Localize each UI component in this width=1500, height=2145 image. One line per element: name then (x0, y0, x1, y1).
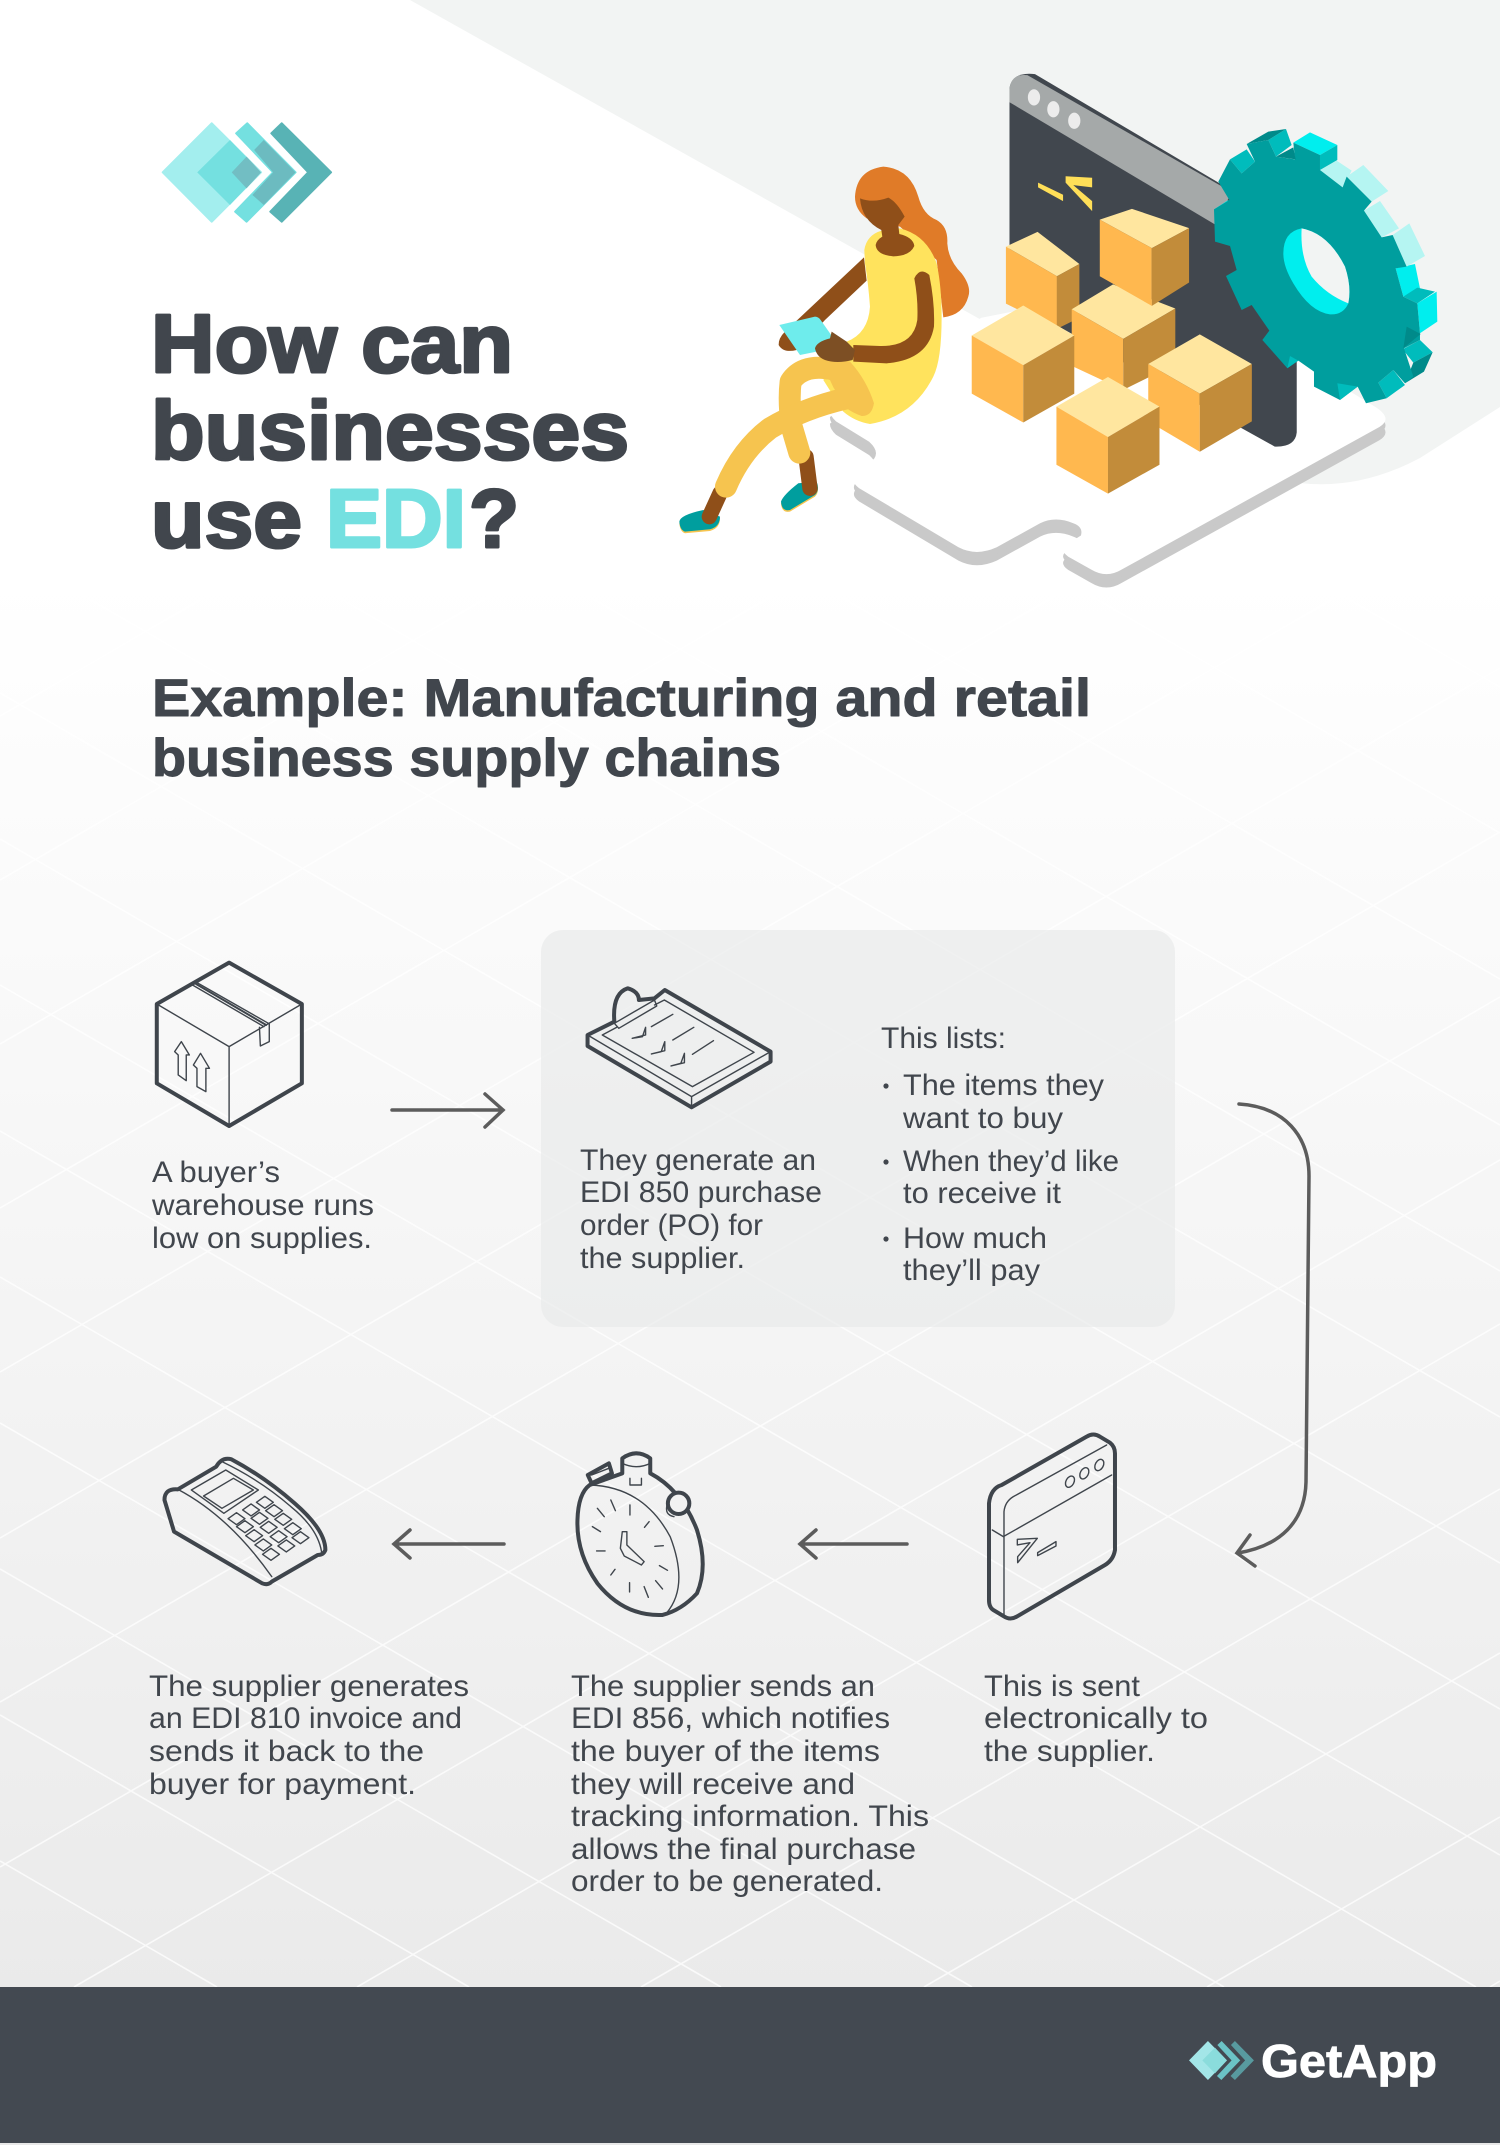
arrow: box to order (392, 1094, 503, 1127)
text: supplier sent electronically: electronically to (984, 1702, 1208, 1735)
title: EDI (326, 472, 466, 565)
text: EDI 856 notification (571, 1670, 929, 1898)
arrow: stopwatch to terminal (394, 1530, 504, 1558)
title: businesses (151, 384, 629, 477)
puzzle piece platform (830, 281, 1386, 587)
list: what the order lists: want to buy (902, 1102, 1063, 1135)
text: generate EDI 850 (580, 1144, 822, 1275)
text: generate EDI 850: order (PO) for (580, 1209, 763, 1242)
panel: purchase order step (541, 930, 1175, 1327)
footer bar (0, 1987, 1500, 2143)
text: supplier sent electronically: the supplier. (984, 1735, 1155, 1768)
text: EDI 810 invoice (149, 1670, 469, 1801)
text: EDI 856 notification: The supplier sends an (571, 1670, 875, 1703)
text: EDI 810 invoice: The supplier generates (149, 1670, 469, 1703)
list: what the order lists: How much (903, 1222, 1047, 1255)
illustration: person, code window, boxes, gear on puzzle piece (679, 74, 1437, 587)
text: EDI 856 notification: EDI 856, which notifies (571, 1702, 890, 1735)
title: ? (469, 472, 519, 565)
code window (1009, 74, 1297, 447)
footer logo mark (1189, 2041, 1254, 2080)
icon: stopwatch (577, 1453, 703, 1615)
footer wordmark: GetApp (1261, 2035, 1437, 2087)
text: supplier sent electronically: This is sent (984, 1670, 1141, 1703)
text: EDI 810 invoice: an EDI 810 invoice and (149, 1702, 462, 1735)
text: generate EDI 850: They generate an (580, 1144, 816, 1177)
text: generate EDI 850: EDI 850 purchase (580, 1176, 822, 1209)
text: generate EDI 850: the supplier. (580, 1242, 745, 1275)
title: How can (151, 297, 513, 390)
icon: clipboard (588, 988, 771, 1107)
text: buyer warehouse: A buyer’s (152, 1156, 280, 1189)
icon: cardboard box (157, 963, 302, 1126)
subheading: business supply chains (152, 729, 781, 788)
subheading: Example: Manufacturing and retail (152, 669, 1091, 728)
list: what the order lists: to receive it (903, 1177, 1062, 1210)
text: EDI 856 notification: they will receive and (571, 1768, 855, 1801)
text: buyer warehouse (151, 1156, 374, 1255)
text: EDI 856 notification: the buyer of the items (571, 1735, 880, 1768)
icon: card payment terminal (164, 1459, 325, 1584)
title: use (151, 472, 302, 565)
text: EDI 810 invoice: buyer for payment. (149, 1768, 416, 1801)
stacked boxes (972, 209, 1252, 494)
list: what the order lists: When they’d like (903, 1145, 1119, 1178)
text: EDI 856 notification: tracking information. This (571, 1800, 929, 1833)
list: what the order lists (881, 1022, 1119, 1287)
text: supplier sent electronically (984, 1670, 1208, 1768)
title (151, 297, 629, 565)
text: EDI 810 invoice: sends it back to the (149, 1735, 424, 1768)
list: what the order lists: The items they (903, 1069, 1104, 1102)
text: buyer warehouse: low on supplies. (152, 1222, 372, 1255)
logo: GetApp diamond mark (163, 123, 331, 222)
list: what the order lists: This lists: (881, 1022, 1006, 1055)
text: buyer warehouse: warehouse runs (151, 1189, 374, 1222)
subheading (152, 669, 1091, 788)
text: EDI 856 notification: order to be generated. (571, 1865, 883, 1898)
arrow: supplier to stopwatch (800, 1530, 907, 1558)
text: EDI 856 notification: allows the final purchase (571, 1833, 916, 1866)
gear (1214, 129, 1437, 403)
list: what the order lists: they’ll pay (903, 1254, 1040, 1287)
arrow: curved down to supplier (1237, 1104, 1309, 1566)
background corner shape (410, 0, 1500, 484)
person reading tablet (679, 167, 969, 533)
icon: terminal window (989, 1434, 1115, 1618)
